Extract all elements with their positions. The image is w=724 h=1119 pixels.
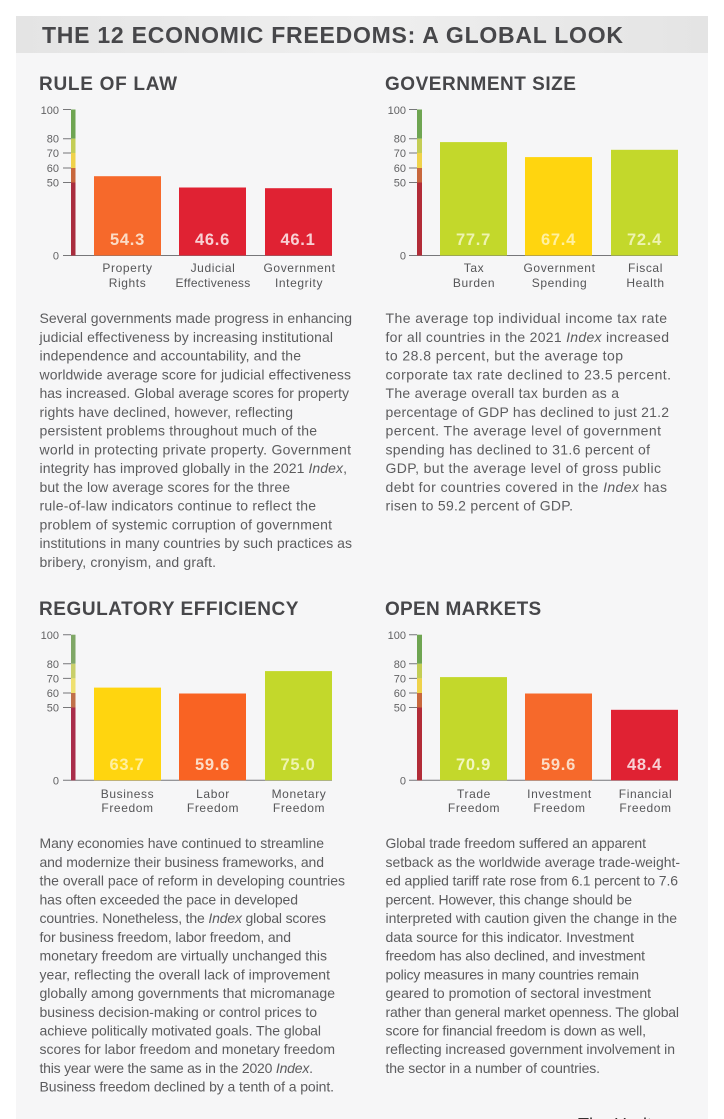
axis scale <box>388 630 678 787</box>
text: government size: to 28.8 percent, but the average top <box>386 348 623 364</box>
text: rule of law: judicial effectiveness by increasing institutional <box>38 329 333 345</box>
bar: business freedom: Freedom <box>101 801 154 815</box>
axis scale: 50 <box>47 178 59 190</box>
text: rule of law: has increased. Global average scores for property <box>40 385 349 401</box>
axis scale: 70 <box>394 148 406 160</box>
text: regulatory efficiency: year, reflecting the overall lack of improvement <box>40 966 330 982</box>
bar: monetary freedom: 75.0 <box>281 756 315 774</box>
axis scale: 60 <box>47 163 59 175</box>
text: rule of law: worldwide average score for judicial effectiveness <box>38 366 351 382</box>
axis scale <box>41 105 332 262</box>
bar: government spending <box>523 157 596 290</box>
bar: judicial effectiveness: Judicial <box>191 261 235 275</box>
bar: investment freedom: 59.6 <box>541 756 576 774</box>
bar: business freedom: Business <box>101 787 154 801</box>
text: rule of law: persistent problems throughout much of the <box>40 423 317 439</box>
axis scale <box>388 105 678 262</box>
text: government size: The average top individual income tax rate <box>386 310 667 326</box>
bar: judicial effectiveness <box>175 188 251 290</box>
text: open markets: setback as the worldwide average trade-weight- <box>386 854 680 870</box>
bar: property rights: Rights <box>109 276 146 290</box>
bar: monetary freedom: Monetary <box>272 787 326 801</box>
axis scale: 80 <box>394 134 406 146</box>
bar: government spending: 67.4 <box>541 231 576 249</box>
bar: business freedom <box>94 688 161 815</box>
bar: investment freedom: Investment <box>527 787 592 801</box>
axis scale: 100 <box>41 105 59 117</box>
bar: fiscal health: Fiscal <box>628 261 663 275</box>
bar: tax burden <box>440 142 507 290</box>
text: government size: risen to 59.2 percent of GDP. <box>386 498 573 514</box>
text: open markets: percent. However, this change should be <box>386 891 632 907</box>
bar: business freedom: 63.7 <box>110 756 144 774</box>
bar: investment freedom <box>525 694 592 815</box>
bar: property rights: Property <box>102 261 153 275</box>
text: regulatory efficiency: achieve politically motivated goals. The global <box>40 1022 321 1038</box>
text: rule of law: world in protecting private property. Government <box>38 441 351 457</box>
text: government size: spending has declined to 31.6 percent of <box>386 441 650 457</box>
text: rule of law: integrity has improved globally in the 2021 Index, <box>40 460 347 476</box>
axis scale: 50 <box>47 702 59 714</box>
heading: open markets: OPEN MARKETS <box>385 599 541 620</box>
axis scale: 100 <box>41 630 59 642</box>
bar: trade freedom: Trade <box>457 787 491 801</box>
axis scale: 60 <box>394 688 406 700</box>
text: open markets: data source for this indicator. Investment <box>386 929 634 945</box>
bar: tax burden: Tax <box>464 261 484 275</box>
text: regulatory efficiency: Business freedom declined by a tenth of a point. <box>40 1079 334 1095</box>
text: government size: percent. The average level of government <box>386 423 661 439</box>
bar: fiscal health: Health <box>626 276 665 290</box>
bar: government integrity <box>263 188 336 290</box>
chart: rule of law <box>41 105 336 290</box>
text: regulatory efficiency: Many economies have continued to streamline <box>40 835 324 851</box>
bar: monetary freedom: Freedom <box>273 801 325 815</box>
text: rule of law: rule-of-law indicators continue to reflect the <box>40 498 316 514</box>
axis scale: 80 <box>394 659 406 671</box>
chart: government size <box>388 105 678 290</box>
bar: judicial effectiveness: 46.6 <box>195 231 230 249</box>
text: rule of law: institutions in many countries by such practices as <box>40 535 352 551</box>
axis scale: 50 <box>394 702 406 714</box>
text: regulatory efficiency <box>40 835 345 1095</box>
bar: monetary freedom <box>265 671 332 815</box>
bar: labor freedom: 59.6 <box>195 756 230 774</box>
bar: fiscal health: 72.4 <box>627 231 662 249</box>
text: government size: The average overall tax burden as a <box>386 385 619 401</box>
axis scale: 0 <box>53 250 59 262</box>
bar: government spending: Government <box>523 261 596 275</box>
text: open markets: Global trade freedom suffered an apparent <box>386 835 646 851</box>
bar: financial freedom: 48.4 <box>627 756 662 774</box>
bar: tax burden: 77.7 <box>456 231 491 249</box>
axis scale: 70 <box>47 148 59 160</box>
text: open markets: interpreted with caution given the change in the <box>386 910 677 926</box>
bar: financial freedom <box>611 710 678 815</box>
text: rule of law: but the low average scores for the three <box>40 479 290 495</box>
bar: labor freedom: Freedom <box>187 801 239 815</box>
text: regulatory efficiency: business decision-making or control prices to <box>40 1004 317 1020</box>
text: regulatory efficiency: monetary freedom are virtually unchanged this <box>40 948 327 964</box>
axis scale: 80 <box>47 134 59 146</box>
text: rule of law: rights have declined, however, reflecting <box>40 404 293 420</box>
text: government size: percentage of GDP has declined to just 21.2 <box>386 404 669 420</box>
bar: trade freedom: 70.9 <box>456 756 491 774</box>
axis scale: 0 <box>400 775 406 787</box>
chart: regulatory efficiency <box>41 630 332 815</box>
axis scale: 70 <box>394 673 406 685</box>
text: open markets: freedom has also declined, and investment <box>386 948 645 964</box>
heading: rule of law: RULE OF LAW <box>39 74 178 95</box>
bar: property rights <box>94 176 161 290</box>
text: open markets: reflecting increased government involvement in <box>386 1041 675 1057</box>
axis scale: 100 <box>388 630 406 642</box>
text: government size: GDP, but the average level of gross public <box>386 460 661 476</box>
text: rule of law <box>38 310 352 570</box>
axis scale: 0 <box>400 250 406 262</box>
text: rule of law: bribery, cronyism, and graft. <box>40 554 216 570</box>
bar: judicial effectiveness: Effectiveness <box>175 276 251 290</box>
text: government size: corporate tax rate declined to 23.5 percent. <box>386 366 671 382</box>
text: regulatory efficiency: the overall pace of reform in developing countries <box>40 873 345 889</box>
bar: trade freedom: Freedom <box>448 801 500 815</box>
text: regulatory efficiency: has often exceeded the pace in developed <box>40 891 298 907</box>
bar: government spending: Spending <box>532 276 587 290</box>
bar: trade freedom <box>440 677 507 815</box>
heading: regulatory efficiency: REGULATORY EFFICIENCY <box>39 599 299 620</box>
bar: fiscal health <box>611 150 678 290</box>
text: open markets: policy measures in many countries remain <box>386 966 639 982</box>
bar: labor freedom: Labor <box>196 787 230 801</box>
text: regulatory efficiency: for business freedom, labor freedom, and <box>40 929 291 945</box>
text: open markets <box>386 835 680 1076</box>
axis scale: 50 <box>394 178 406 190</box>
axis scale: 60 <box>394 163 406 175</box>
bar: government integrity: Government <box>263 261 336 275</box>
text: regulatory efficiency: globally among governments that micromanage <box>40 985 335 1001</box>
axis scale: 0 <box>53 775 59 787</box>
bar: financial freedom: Financial <box>619 787 672 801</box>
text: open markets: rather than general market openness. The global <box>386 1004 679 1020</box>
text: open markets: score for financial freedom is down as well, <box>386 1022 646 1038</box>
bar: labor freedom <box>179 694 246 815</box>
text: regulatory efficiency: and modernize their business frameworks, and <box>40 854 324 870</box>
text: government size: debt for countries covered in the Index has <box>386 479 667 495</box>
header band <box>16 16 708 52</box>
heading: government size: GOVERNMENT SIZE <box>385 74 576 95</box>
bar: financial freedom: Freedom <box>619 801 672 815</box>
chart: open markets <box>388 630 678 815</box>
text: government size: for all countries in the 2021 Index increased <box>386 329 669 345</box>
axis scale: 70 <box>47 673 59 685</box>
axis scale: 60 <box>47 688 59 700</box>
text: rule of law: Several governments made progress in enhancing <box>40 310 352 326</box>
text: government size <box>386 310 671 514</box>
title: THE 12 ECONOMIC FREEDOMS: A GLOBAL LOOK <box>42 22 624 48</box>
axis scale: 80 <box>47 659 59 671</box>
bar: tax burden: Burden <box>453 276 495 290</box>
bar: government integrity: 46.1 <box>281 231 315 249</box>
axis scale <box>41 630 332 787</box>
text: rule of law: independence and accountability, and the <box>40 348 301 364</box>
text: open markets: ed applied tariff rate rose from 6.1 percent to 7.6 <box>386 873 678 889</box>
bar: property rights: 54.3 <box>110 231 145 249</box>
text: open markets: geared to promotion of sectoral investment <box>386 985 651 1001</box>
text: open markets: the sector in a number of countries. <box>386 1060 600 1076</box>
text: regulatory efficiency: scores for labor freedom and monetary freedom <box>40 1041 335 1057</box>
bar: government integrity: Integrity <box>275 276 323 290</box>
text: regulatory efficiency: this year were the same as in the 2020 Index. <box>40 1060 313 1076</box>
axis scale: 100 <box>388 105 406 117</box>
text: rule of law: problem of systemic corruption of government <box>40 516 332 532</box>
bar: investment freedom: Freedom <box>533 801 586 815</box>
text: regulatory efficiency: countries. Nonetheless, the Index global scores <box>40 910 326 926</box>
